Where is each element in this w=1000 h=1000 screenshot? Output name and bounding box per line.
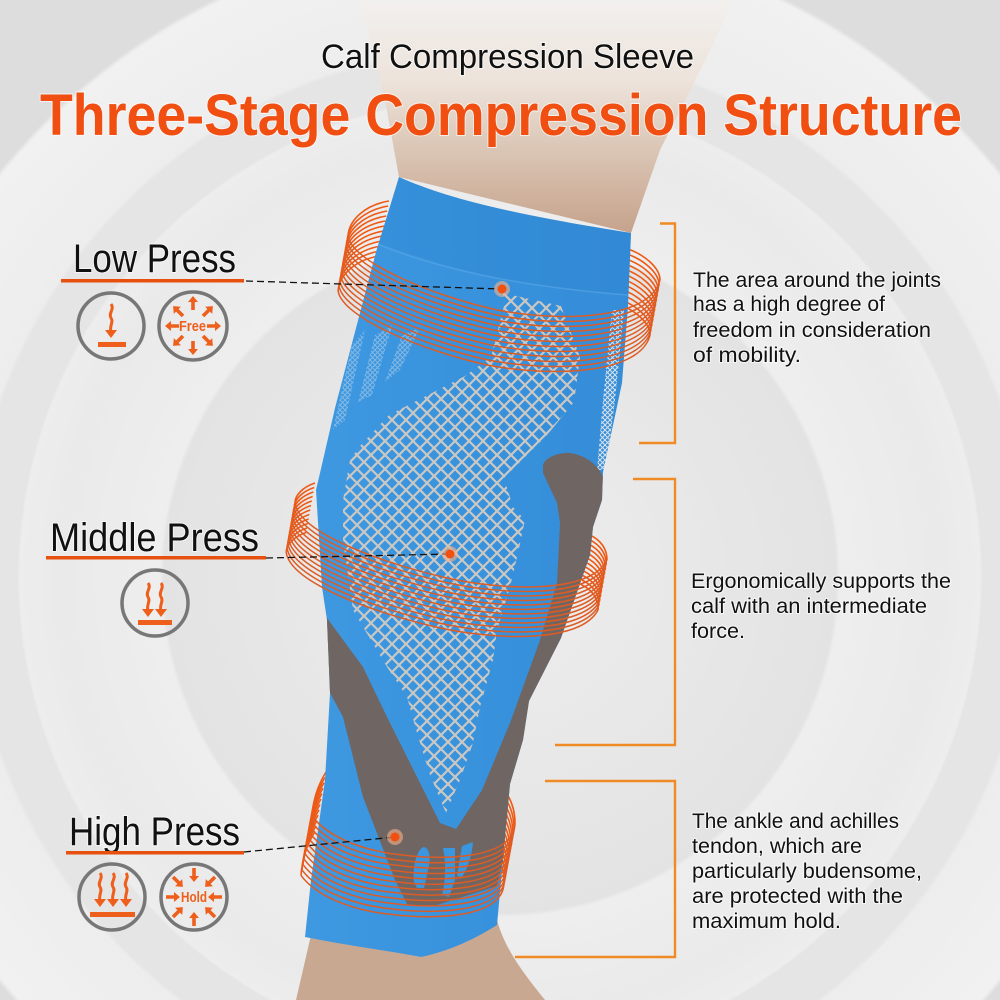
text: high zone: maximum hold. — [692, 910, 841, 933]
low press callout — [61, 237, 510, 360]
high press callout: High Press — [69, 810, 240, 854]
text: low zone: The area around the joints — [693, 269, 941, 292]
text: middle zone: force. — [691, 620, 745, 643]
middle press callout — [46, 516, 458, 636]
text: high zone — [692, 810, 922, 933]
text: middle zone: Ergonomically supports the — [691, 570, 951, 593]
icon: free — [159, 292, 227, 360]
icon: high heat — [79, 864, 145, 930]
sleeve cuff shading — [378, 177, 631, 292]
text: middle zone — [691, 570, 951, 643]
icon: hold — [161, 864, 227, 930]
bracket: middle zone — [555, 479, 675, 745]
middle press callout: Middle Press — [50, 516, 259, 560]
bracket: low zone — [639, 224, 675, 443]
text: low zone: of mobility. — [693, 344, 801, 367]
text: low zone: has a high degree of — [693, 293, 885, 316]
pressure rings in front of sleeve — [286, 236, 660, 917]
low press callout: Low Press — [73, 237, 236, 281]
faint knit stripes — [333, 326, 420, 430]
pressure rings behind sleeve — [286, 201, 660, 882]
icon: free: Free — [179, 319, 206, 335]
icon: low heat — [78, 293, 144, 359]
blue slots — [414, 842, 473, 897]
text: high zone: are protected with the — [692, 885, 903, 908]
subtitle: Calf Compression Sleeve — [321, 38, 694, 76]
grey V panel — [322, 453, 604, 906]
text: high zone: particularly budensome, — [692, 860, 922, 883]
cuff seam — [375, 243, 640, 296]
text: low zone: freedom in consideration — [693, 319, 931, 342]
icon: hold: Hold — [181, 890, 207, 906]
right lattice stripe — [597, 310, 624, 470]
text: high zone: tendon, which are — [692, 835, 862, 858]
bracket: high zone — [515, 781, 675, 957]
text: middle zone: calf with an intermediate — [691, 595, 927, 618]
compression sleeve — [290, 170, 640, 970]
text: low zone — [693, 269, 941, 367]
leg — [296, 0, 733, 1000]
high press callout — [66, 810, 403, 930]
text: high zone: The ankle and achilles — [692, 810, 899, 833]
lattice panel — [343, 293, 580, 813]
icon: medium heat — [122, 570, 188, 636]
